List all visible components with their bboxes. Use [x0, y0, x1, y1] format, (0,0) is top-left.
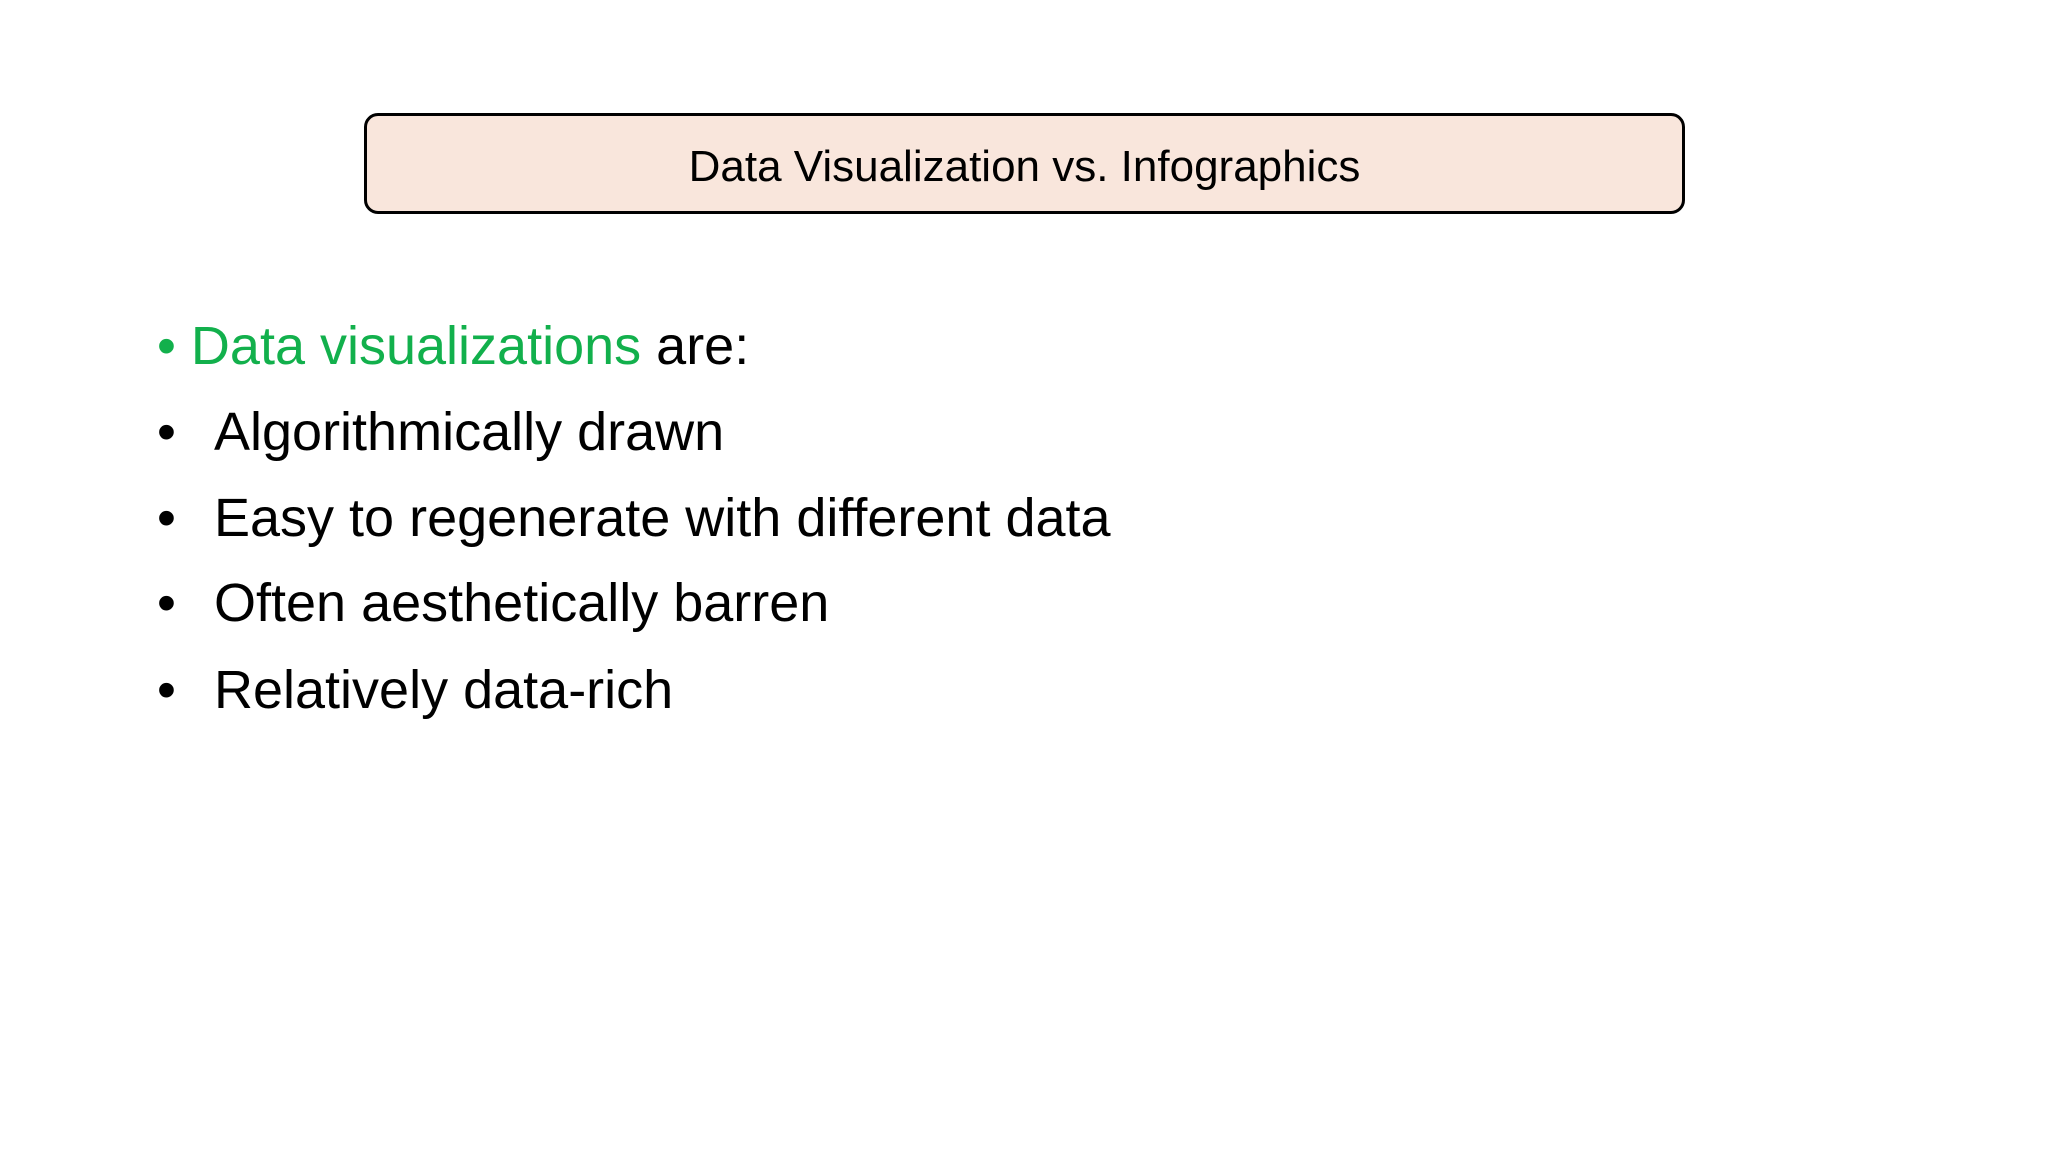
bullet list [157, 316, 1111, 720]
bullet 1: • [157, 402, 176, 462]
bullet 1: Algorithmically drawn [214, 402, 724, 462]
title [364, 113, 1685, 214]
bullet 3: Often aesthetically barren [214, 573, 829, 633]
intro line: • Data visualizations are: [157, 316, 749, 376]
title: Data Visualization vs. Infographics [689, 142, 1360, 191]
bullet 3: • [157, 573, 176, 633]
bullet 4: Relatively data-rich [214, 660, 673, 720]
bullet 2: Easy to regenerate with different data [214, 488, 1111, 548]
bullet 4: • [157, 660, 176, 720]
bullet 2: • [157, 488, 176, 548]
